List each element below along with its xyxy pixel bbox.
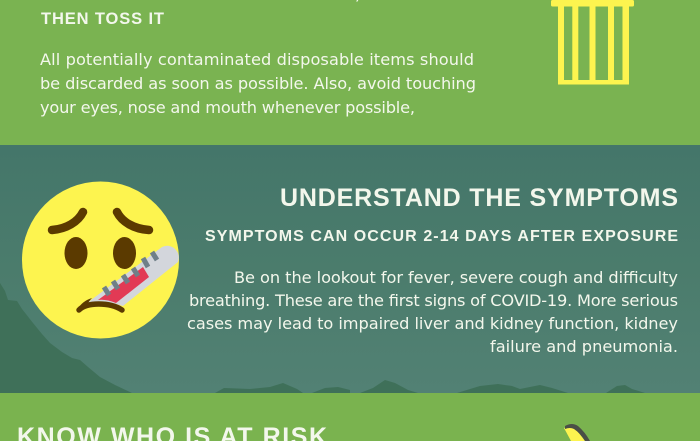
- subheading: symptom timing: SYMPTOMS CAN OCCUR 2-14 DAYS AFTER EXPOSURE: [205, 228, 678, 245]
- eyes: [64, 237, 136, 269]
- body text: disposal advice: All potentially contaminated disposable items should: [40, 50, 474, 69]
- body text: symptoms: cases may lead to impaired liver and kidney function, kidney: [187, 314, 678, 333]
- body text: symptoms: Be on the lookout for fever, severe cough and difficulty: [234, 268, 678, 287]
- body text: disposal advice: [40, 50, 476, 117]
- panel: understand the symptoms: [0, 145, 700, 393]
- heading: understand the symptoms: UNDERSTAND THE SYMPTOMS: [280, 184, 678, 212]
- icon: trash can: [551, 0, 634, 84]
- body text: disposal advice: be discarded as soon as possible. Also, avoid touching: [40, 74, 476, 93]
- panel: know who is at risk: [0, 393, 700, 441]
- subheading: then toss it: THEN TOSS IT: [41, 10, 164, 28]
- thermometer: [87, 246, 179, 306]
- eyebrows: [52, 212, 149, 230]
- body text: symptoms: failure and pneumonia.: [490, 337, 678, 356]
- body text: symptoms: [187, 268, 678, 356]
- background: mountains: [0, 283, 645, 393]
- icon: clipped yellow illustration: [564, 424, 590, 441]
- icon: sick face with thermometer: [22, 182, 179, 338]
- mouth: [79, 304, 122, 310]
- panel: toss it: [0, 0, 700, 145]
- body text: disposal advice: your eyes, nose and mouth whenever possible,: [40, 98, 415, 117]
- body text: symptoms: breathing. These are the first signs of COVID-19. More serious: [189, 291, 678, 310]
